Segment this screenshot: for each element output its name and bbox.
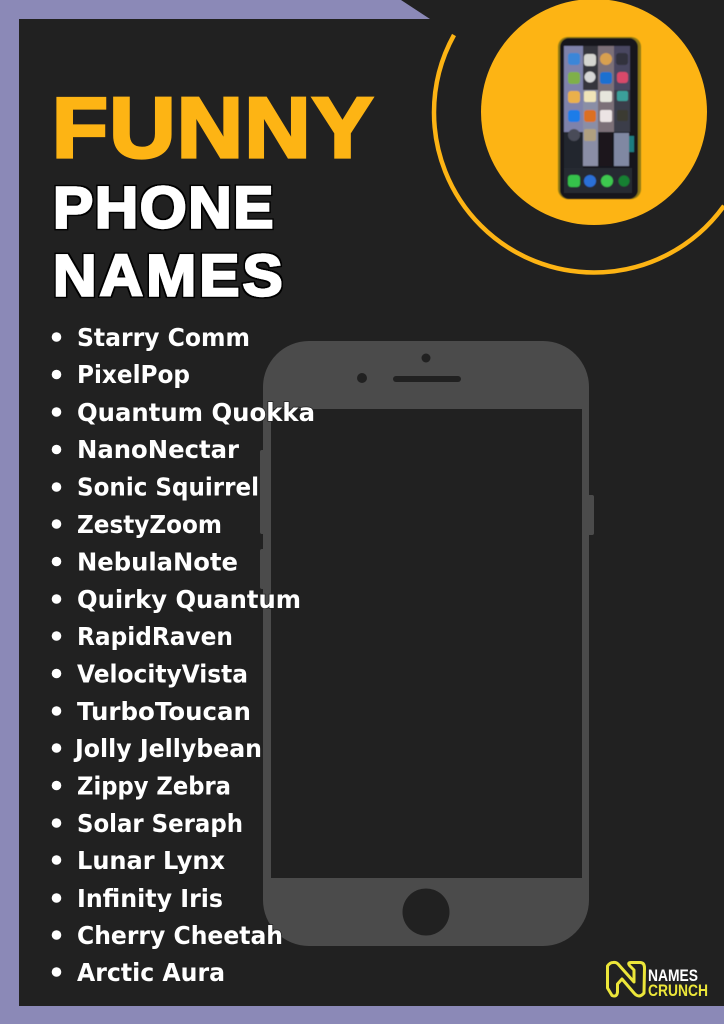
list of phone names: PixelPop [77,360,190,389]
list of phone names [52,323,315,987]
icon: logo mark [608,962,644,996]
background phone outline [260,341,594,946]
list of phone names: Starry Comm [77,323,250,352]
list of phone names: TurboToucan [77,697,251,726]
list of phone names: Lunar Lynx [77,846,225,875]
logo text: crunch: CRUNCH [648,982,708,1000]
list of phone names: Quantum Quokka [77,398,315,427]
heading: phone: PHONE [53,174,273,240]
list of phone names: NanoNectar [77,435,240,464]
list of phone names: Quirky Quantum [77,585,301,614]
yellow ring arc [434,35,724,272]
yellow circle [481,0,707,225]
list of phone names: Zippy Zebra [77,772,231,800]
icon: smartphone photo [558,37,641,199]
list of phone names: Cherry Cheetah [77,921,283,950]
list of phone names: Arctic Aura [77,958,225,987]
list of phone names: NebulaNote [77,548,238,576]
list of phone names: Sonic Squirrel [77,472,259,502]
list of phone names: Jolly Jellybean [73,734,262,763]
list of phone names: ZestyZoom [77,510,222,539]
logo: names crunch [608,962,708,1000]
list of phone names: RapidRaven [77,622,233,651]
heading: funny: FUNNY [52,80,373,175]
list of phone names: Infinity Iris [77,884,223,913]
heading: names: NAMES [53,242,283,308]
list of phone names: Solar Seraph [77,809,243,838]
list of phone names: VelocityVista [77,660,248,688]
logo text: names: NAMES [648,967,698,985]
title [52,80,373,308]
